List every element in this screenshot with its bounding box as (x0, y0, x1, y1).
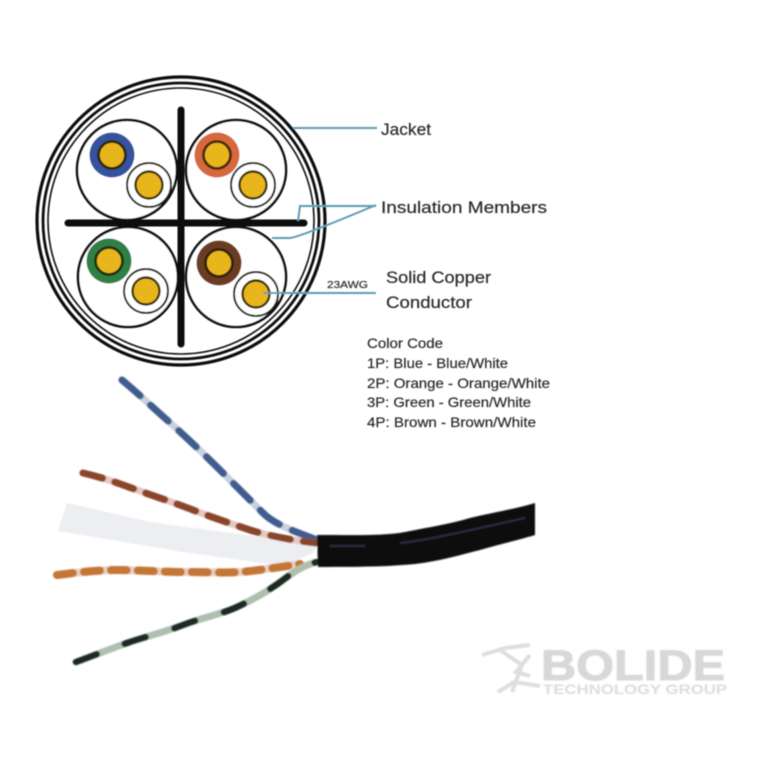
logo wordmark: BOLIDE (541, 642, 725, 690)
color code list: 4P: Brown - Brown/White (367, 414, 536, 430)
green pair (76, 562, 317, 662)
pair 3: green (78, 227, 178, 327)
pair 1: blue (77, 120, 177, 220)
blue pair (122, 380, 317, 540)
logo tagline: TECHNOLOGY GROUP (543, 682, 727, 697)
color code list: 1P: Blue - Blue/White (367, 355, 508, 371)
cable photo (57, 380, 535, 662)
label: Insulation Members: Insulation Members (381, 199, 547, 217)
label: Solid Copper Conductor: Conductor (386, 294, 473, 312)
label: 23AWG: 23AWG (327, 279, 368, 291)
black jacket (317, 503, 535, 567)
logo icon (482, 645, 540, 692)
cable cross-section diagram (37, 77, 377, 365)
leader lines (263, 128, 377, 293)
logo: Bolide Technology Group (482, 642, 727, 697)
label: Solid Copper Conductor: Solid Copper (386, 269, 492, 287)
label: Solid Copper Conductor (386, 269, 492, 312)
white separator tape (58, 503, 320, 566)
orange pair (57, 564, 300, 575)
label: Jacket: Jacket (381, 121, 431, 139)
color code list: Color Code (367, 335, 443, 351)
color code list: 2P: Orange - Orange/White (367, 375, 550, 391)
pair 2: orange (186, 120, 286, 220)
color code list (367, 335, 550, 430)
labels (327, 121, 550, 430)
cross separator (68, 110, 304, 344)
color code list: 3P: Green - Green/White (367, 394, 531, 410)
brown pair (83, 473, 317, 543)
jacket rings (37, 77, 325, 365)
pair 4: brown (186, 227, 286, 327)
